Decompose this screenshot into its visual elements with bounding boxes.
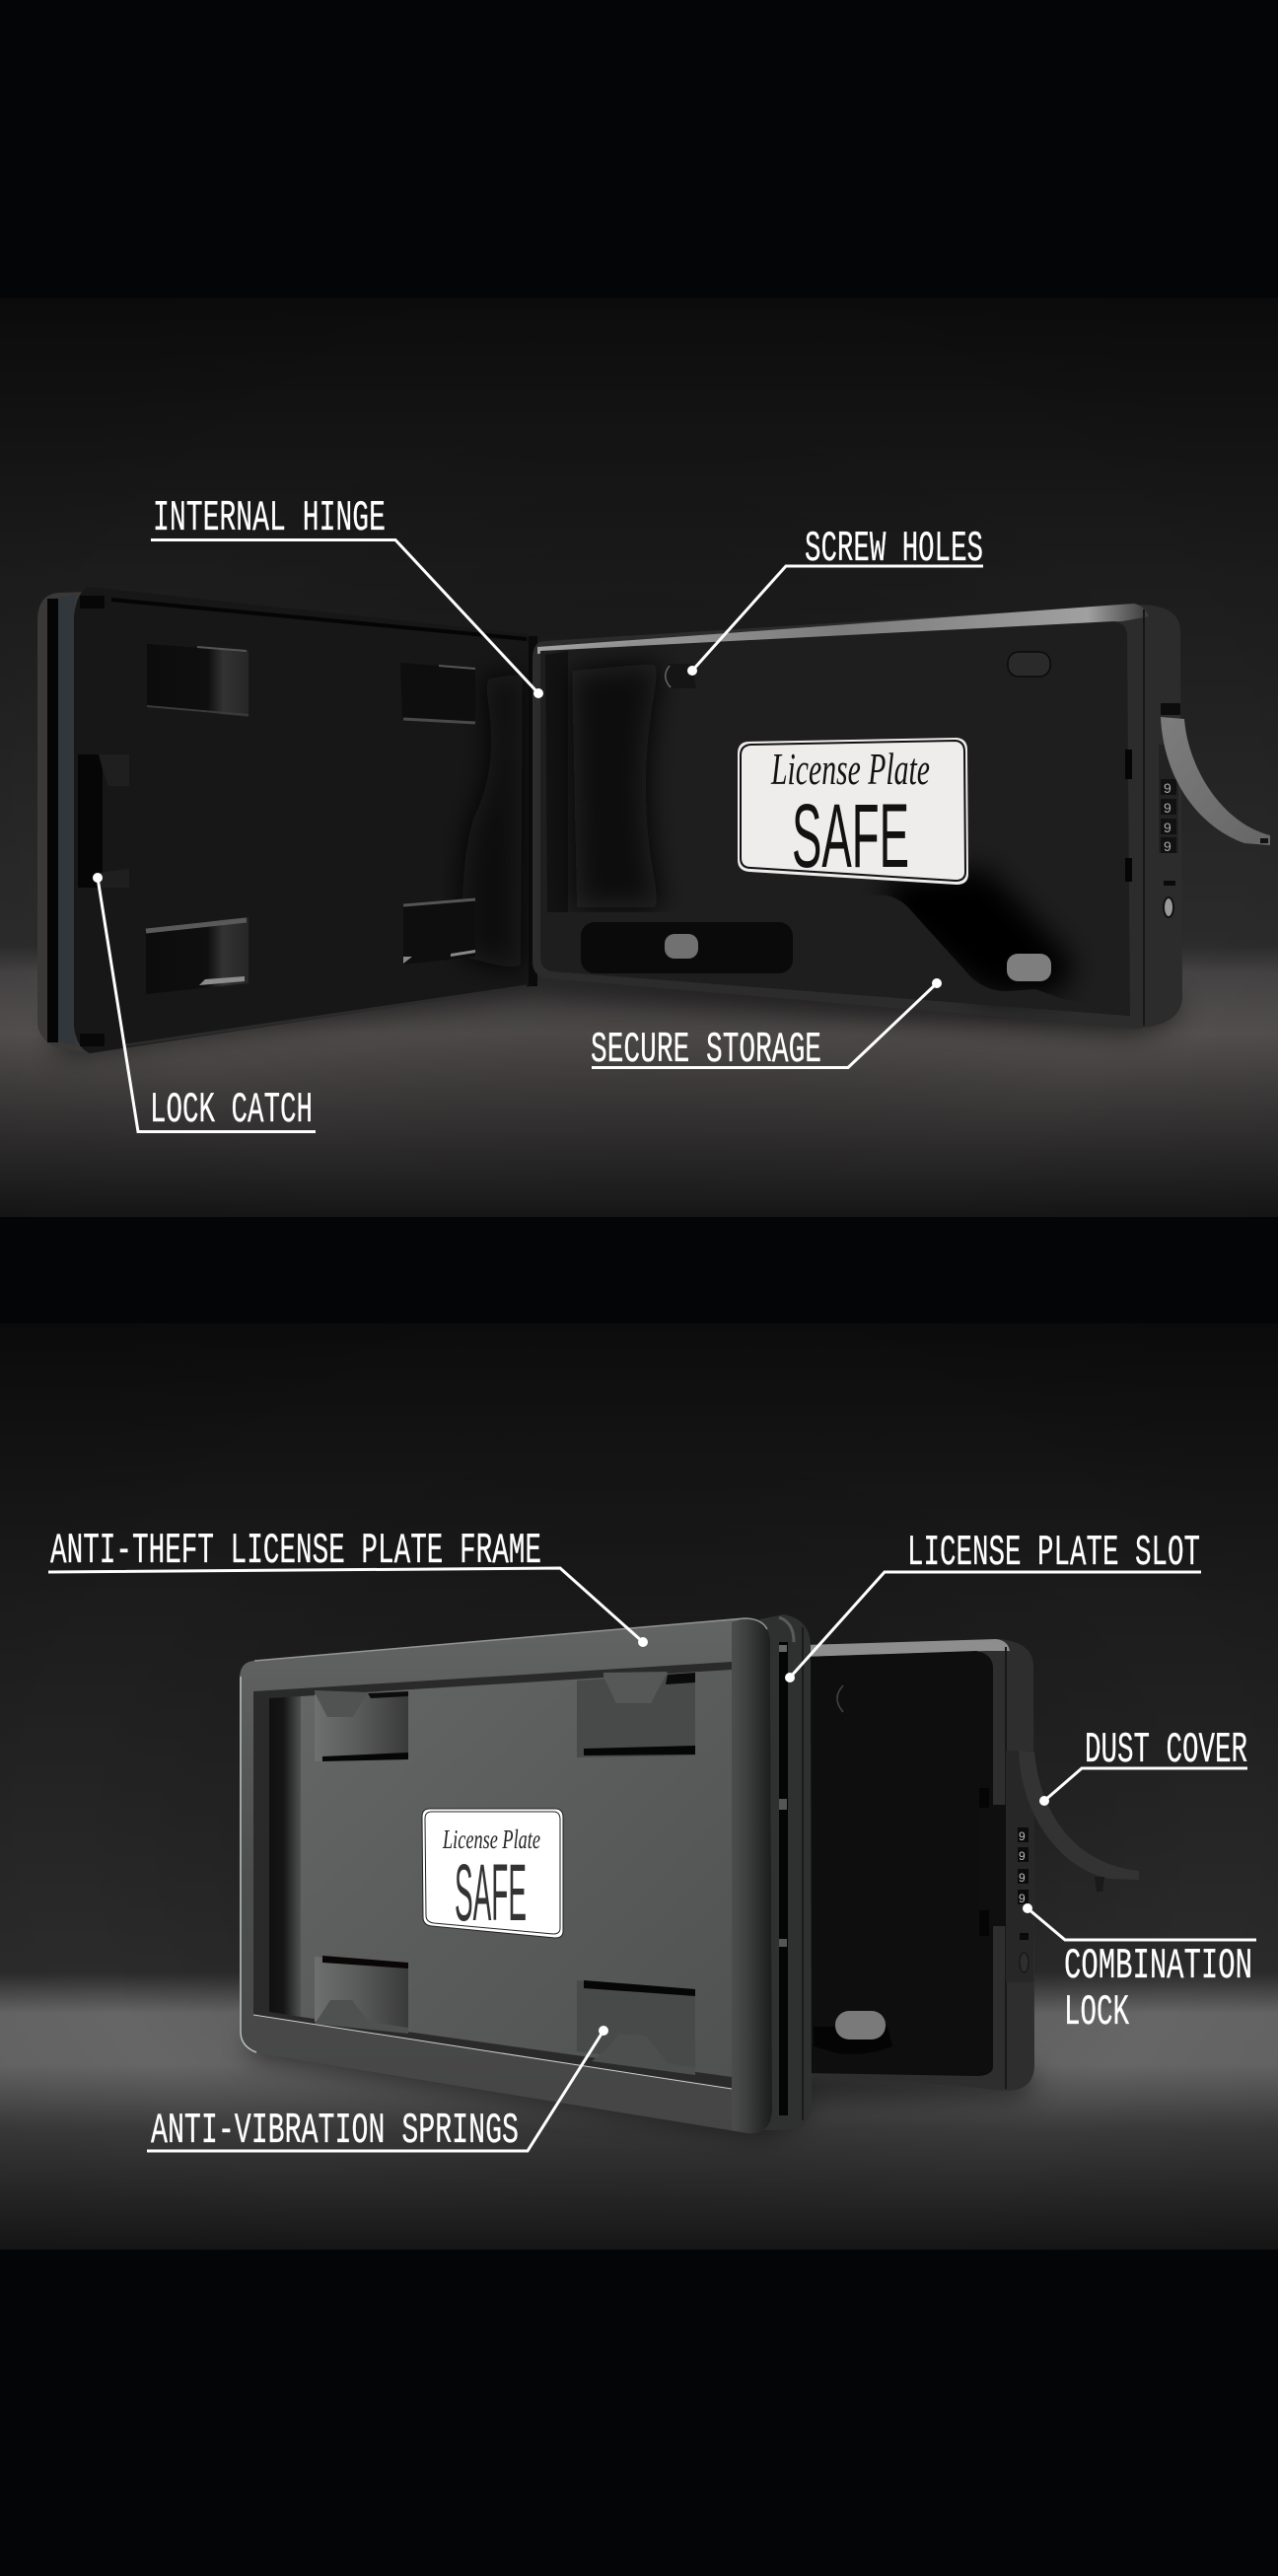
combination lock [1159,745,1178,917]
label: combination lock: LOCK [1064,1988,1129,2038]
combination lock: 9 [1164,800,1172,816]
label: anti-theft license plate frame [48,1527,648,1647]
label: screw holes: SCREW HOLES [805,525,983,574]
anti-theft license plate frame [240,1618,772,2133]
door spring slot: top left [147,644,248,717]
combination lock digits [1018,1827,1029,1972]
label: secure storage [591,978,942,1075]
license plate badge: License Plate [770,744,930,794]
label: dust cover [1039,1726,1247,1806]
spring: bottom right [577,1980,695,2075]
label: combination lock [1023,1903,1256,2038]
rear bottom hole [814,2011,892,2054]
license plate badge: License Plate [442,1825,540,1854]
license plate badge [422,1809,563,1938]
label: license plate slot [785,1529,1201,1682]
combination lock digits: 9 [1019,1871,1026,1885]
license plate badge [738,738,968,887]
storage slot [581,922,793,973]
combination lock digits: 9 [1019,1849,1026,1863]
label: lock catch [93,873,316,1135]
combination lock digits: 9 [1019,1892,1026,1905]
license plate badge: SAFE [455,1848,527,1938]
label: anti-theft license plate frame: ANTI-THEFT LICENSE PLATE FRAME [50,1527,541,1576]
panel: closed safe exploded view [0,1324,1278,2250]
label: secure storage: SECURE STORAGE [591,1026,821,1075]
label: internal hinge [151,494,543,698]
rear top hole [837,1685,843,1712]
rear dust cover [1019,1751,1139,1892]
door spring slot: bottom left [146,917,248,994]
lock catch [78,754,129,888]
rear safe body [804,1639,1139,2091]
door hinge [529,636,541,986]
combination lock: 9 [1164,820,1172,835]
safe door: left half [37,587,541,1053]
screw hole: top left [665,664,696,688]
panel 1 background [0,298,1278,1217]
label: anti-vibration springs [147,2026,608,2156]
second frame layer and plate slot [759,1614,812,2130]
label: screw holes [687,525,983,676]
screw hole: bottom right [1007,954,1051,981]
panel: open safe [0,298,1278,1217]
screw hole: bottom left [665,934,698,959]
spring: top right [577,1672,695,1757]
side latch notches [1125,750,1132,882]
label: lock catch: LOCK CATCH [150,1086,313,1135]
spring: bottom left [315,1956,408,2034]
rear lock block [979,1751,1033,1982]
combination lock digits: 9 [1019,1829,1026,1843]
screw hole: top right [1008,652,1050,677]
combination lock: 9 [1164,780,1172,796]
door spring slot: top right [400,663,475,725]
license plate badge: SAFE [792,786,909,887]
storage floor [548,891,1130,1016]
dust cover [1161,703,1270,845]
panel 2 background [0,1324,1278,2250]
frame opening and back plate [253,1662,732,2089]
door spring slot: bottom right [403,897,475,965]
safe body: right half [532,604,1270,1029]
label: internal hinge: INTERNAL HINGE [153,494,386,543]
spring: top left [315,1690,408,1761]
combination lock: 9 [1164,838,1172,854]
storage pocket shadow [888,868,1075,996]
label: anti-vibration springs: ANTI-VIBRATION SPRINGS [151,2107,519,2156]
